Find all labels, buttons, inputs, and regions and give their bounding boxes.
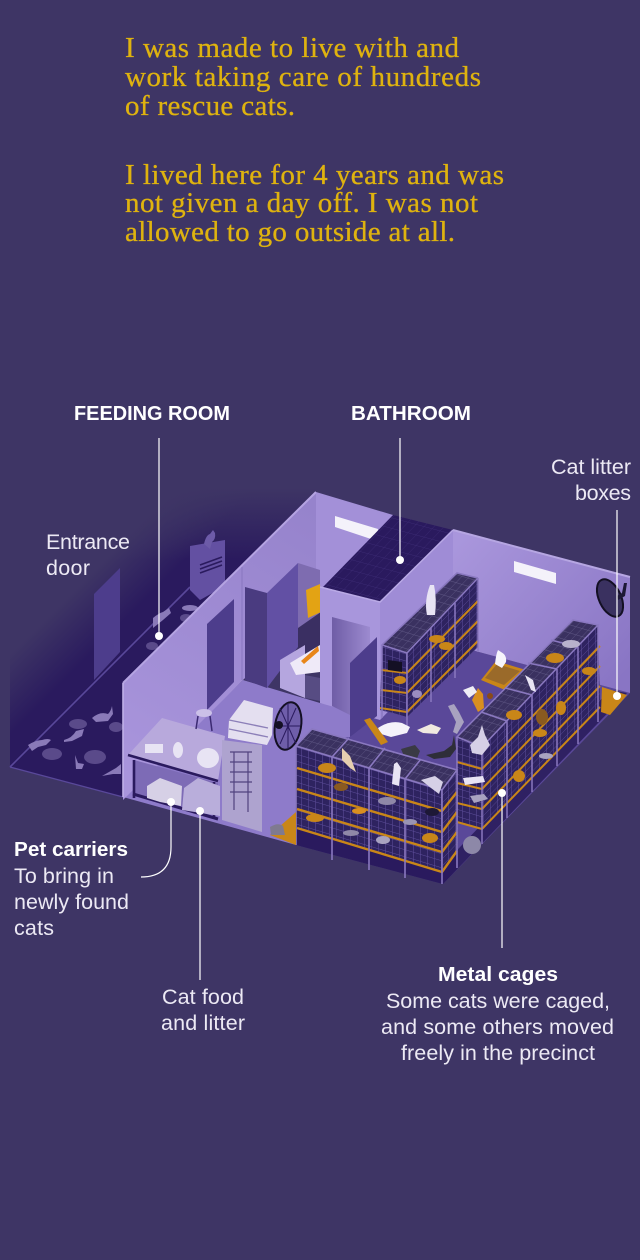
wall fan, right [592,575,628,621]
label: cat food and litter: and litter [161,1011,245,1035]
intro text: first paragraph [125,32,481,122]
wall unit with cat on top [190,530,225,600]
label: cat litter boxes [551,455,631,700]
isometric floor plan [10,475,630,884]
grey cat in carrier corner [463,836,481,854]
label: feeding room: FEEDING ROOM [74,403,230,425]
suitcase [306,584,321,618]
front cage block [296,729,458,884]
intro text: first paragraph: of rescue cats. [125,90,295,122]
label: feeding room [74,403,230,640]
wardrobe [245,563,320,688]
air conditioner, main room [514,561,556,584]
divider wall [123,492,316,800]
bed with orange blanket [280,612,321,701]
back cage block [380,573,478,728]
entrance door [94,568,120,680]
bathroom dark wall [323,515,453,602]
front dark door [350,637,377,737]
room door [207,599,234,710]
intro text: first paragraph: work taking care of hundreds [125,61,481,93]
air conditioner, back room [335,516,378,541]
label: metal cages [381,789,614,1065]
feeding room: dark walls and floor [10,475,325,797]
right cage block [457,620,600,844]
main room floor [123,645,630,884]
label: bathroom: BATHROOM [351,403,471,425]
label: pet carriers: cats [14,916,54,940]
label: cat food and litter: Cat food [162,985,244,1009]
bathroom partition wall [320,530,453,720]
label: cat food and litter [161,807,245,1035]
label: metal cages: Metal cages [438,964,558,986]
right wall [453,530,630,693]
pet carrier [147,778,182,806]
label: pet carriers [14,798,175,940]
label: entrance door: door [46,556,90,580]
label: cat litter boxes: Cat litter [551,455,631,479]
label: entrance door: Entrance [46,530,130,554]
label: pet carriers: newly found [14,890,129,914]
label: pet carriers: Pet carriers [14,839,128,861]
bags of food and litter [182,778,220,816]
stack of pillows [228,700,273,745]
intro text: second paragraph: not given a day off. I was not [125,187,478,219]
litter box, centre [481,650,526,690]
work table [128,718,225,819]
wall fan, left [271,700,305,752]
intro text: second paragraph: allowed to go outside at all. [125,216,455,248]
feeding room cats and bowls [28,605,198,776]
stool [196,709,212,731]
litter box and cat, front [270,812,296,845]
label: pet carriers: To bring in [14,864,114,888]
bathroom door [332,617,370,715]
litter box, right corner [601,687,627,715]
intro text: first paragraph: I was made to live with and [125,32,460,64]
cats on the floor [364,686,493,761]
back wall segment [316,492,393,640]
label: entrance door [46,530,130,580]
intro text: second paragraph [125,159,504,248]
intro text: second paragraph: I lived here for 4 years and was [125,159,504,191]
cabinet [222,740,262,832]
label: bathroom [351,403,471,564]
label: metal cages: freely in the precinct [401,1041,595,1065]
label: metal cages: Some cats were caged, [386,989,610,1013]
label: metal cages: and some others moved [381,1015,614,1039]
label: cat litter boxes: boxes [575,481,631,505]
